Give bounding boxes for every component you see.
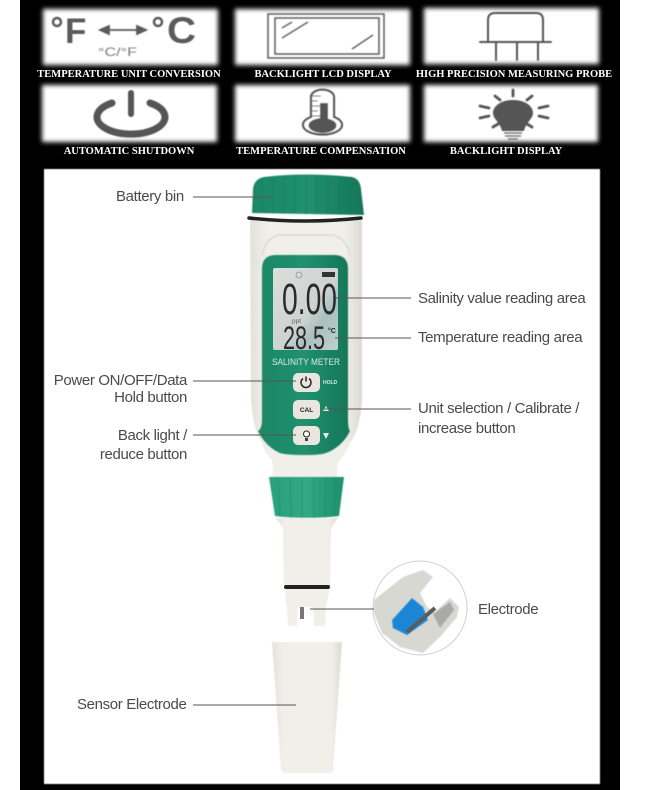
- label: back light: [100, 427, 296, 463]
- icon: LCD display: [268, 14, 384, 58]
- feature captions: TEMPERATURE UNIT CONVERSION: [37, 69, 221, 80]
- label: back light: Back light /: [118, 427, 188, 444]
- feature captions: BACKLIGHT LCD DISPLAY: [254, 69, 392, 80]
- sensor electrode slot: [300, 607, 304, 619]
- reading: unit: °C: [328, 327, 336, 335]
- panel: product diagram: [44, 169, 600, 784]
- reading: temperature: 28.5: [283, 320, 325, 356]
- salinity meter: [249, 174, 364, 626]
- label: electrode: Electrode: [478, 601, 538, 618]
- cap ribs: [262, 176, 350, 215]
- label: power button: Hold button: [114, 389, 187, 406]
- probe stem: [276, 518, 338, 626]
- backlight button: [293, 426, 329, 445]
- label: salinity value reading area: Salinity value reading area: [418, 290, 586, 307]
- icon: power: [97, 93, 165, 134]
- label: unit selection: increase button: [418, 420, 515, 437]
- icon: temperature unit conversion: F: [65, 12, 86, 51]
- label: power button: [54, 372, 296, 406]
- feature captions: AUTOMATIC SHUTDOWN: [64, 146, 195, 157]
- icon tiles row: [42, 8, 599, 142]
- body bevel: [262, 235, 350, 255]
- cal button: [293, 400, 329, 419]
- power button: [293, 373, 338, 392]
- label: unit selection: Unit selection / Calibrate /: [418, 400, 580, 417]
- cal button: CAL: [300, 407, 313, 414]
- icon: thermometer: [303, 90, 342, 134]
- feature captions: TEMPERATURE COMPENSATION: [236, 146, 406, 157]
- feature captions: BACKLIGHT DISPLAY: [450, 146, 563, 157]
- icon: measuring probe: [480, 13, 551, 60]
- lower collar: [269, 477, 344, 518]
- feature captions: HIGH PRECISION MEASURING PROBE: [416, 69, 612, 80]
- feature captions: [37, 69, 612, 157]
- reading: ppt: ppt: [292, 318, 301, 325]
- icon: temperature unit conversion: [53, 10, 196, 59]
- o-ring: [284, 585, 330, 589]
- standby indicator: [296, 272, 302, 278]
- label: battery bin: Battery bin: [116, 188, 184, 205]
- protective cap: [272, 642, 342, 773]
- lcd screen: [273, 268, 338, 350]
- label: unit selection: [324, 400, 580, 437]
- control faceplate: [258, 255, 350, 455]
- battery indicator: [322, 272, 335, 277]
- cap seal: [249, 218, 361, 221]
- meter body: [250, 220, 362, 480]
- icon: bulb: [480, 90, 548, 139]
- label: back light: reduce button: [100, 446, 187, 463]
- reading: salinity: 0.00: [282, 275, 337, 324]
- battery cap: [252, 174, 364, 215]
- icon: temperature unit conversion: C: [167, 10, 196, 51]
- meter name: SALINITY METER: [272, 357, 340, 367]
- label: power button: Power ON/OFF/Data: [54, 372, 188, 389]
- electrode detail inset: [373, 561, 467, 655]
- power button: HOLD: [323, 380, 338, 386]
- label: sensor electrode: Sensor Electrode: [77, 696, 186, 713]
- label: temperature reading area: Temperature reading area: [418, 329, 583, 346]
- icon: temperature unit conversion: °C/°F: [98, 45, 137, 59]
- collar ribs: [278, 478, 336, 518]
